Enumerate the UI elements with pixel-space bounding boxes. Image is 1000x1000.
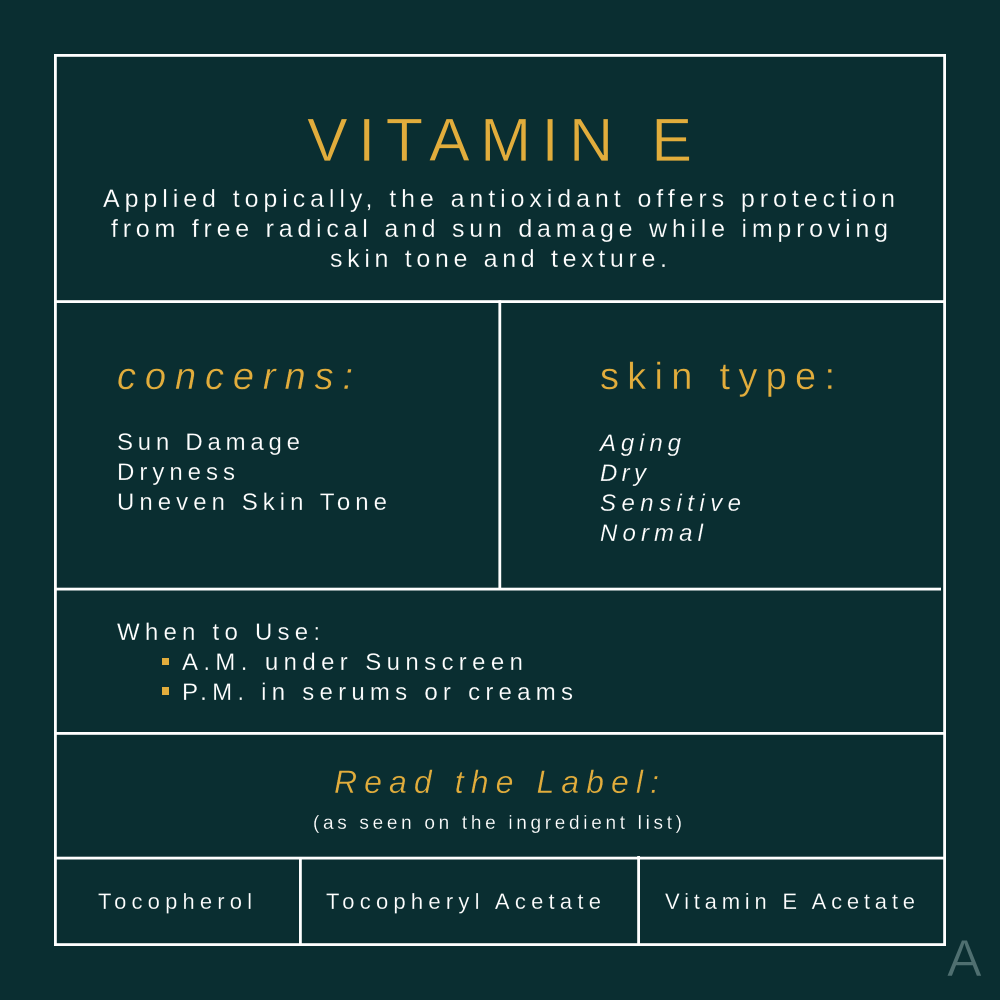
concerns list: Uneven Skin Tone [117, 489, 387, 516]
panel: when to use [117, 619, 573, 706]
read the label heading: Read the Label: [334, 764, 659, 800]
panel: concerns [117, 356, 387, 516]
skin type list: Aging [598, 430, 682, 457]
ingredient: vitamin e acetate: Vitamin E Acetate [665, 889, 915, 914]
concerns list [117, 429, 387, 516]
title: VITAMIN E [307, 106, 692, 174]
watermark logo: A [947, 930, 982, 988]
panel: skin type [598, 356, 835, 547]
panel: read the label [313, 764, 682, 834]
when to use heading: When to Use: [117, 619, 320, 646]
ingredient: tocopheryl acetate: Tocopheryl Acetate [326, 889, 601, 914]
ingredient list note: (as seen on the ingredient list) [313, 813, 682, 834]
intro text [103, 185, 895, 273]
skin type list: Dry [600, 460, 648, 487]
skin type list: Sensitive [600, 490, 741, 517]
skin type heading: skin type: [600, 356, 835, 398]
ingredient: tocopherol: Tocopherol [98, 889, 252, 914]
concerns list: Sun Damage [117, 429, 300, 456]
bullet: morning: A.M. under Sunscreen [182, 649, 523, 676]
intro text: Applied topically, the antioxidant offers protection [103, 185, 895, 213]
intro text: from free radical and sun damage while improving [111, 215, 888, 243]
panel: header [103, 106, 895, 273]
concerns list: Dryness [117, 459, 235, 486]
concerns heading: concerns: [117, 356, 353, 398]
panel: ingredient names [98, 889, 915, 914]
bullet: evening: P.M. in serums or creams [182, 679, 573, 706]
intro text: skin tone and texture. [330, 245, 667, 273]
skin type list [598, 430, 741, 547]
skin type list: Normal [600, 520, 704, 547]
